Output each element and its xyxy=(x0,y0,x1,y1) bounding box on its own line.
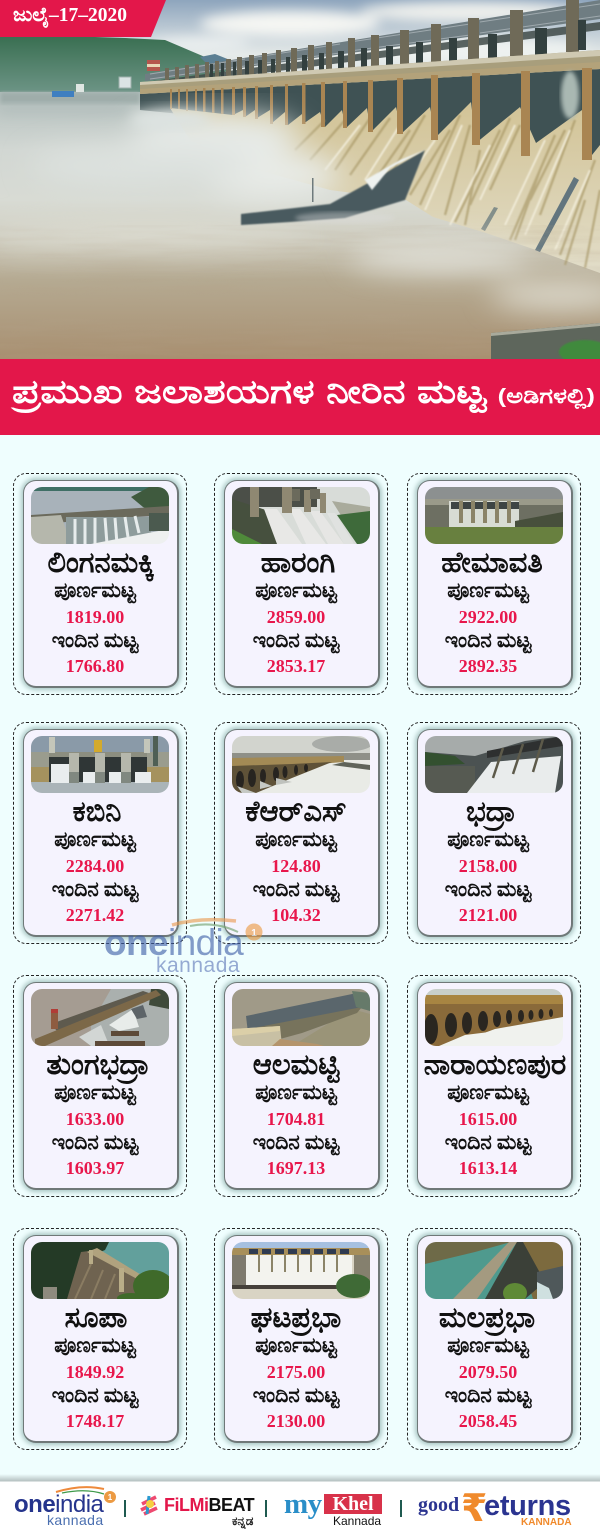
full level label: ಪೂರ್ಣಮಟ್ಟ xyxy=(255,829,337,851)
footer xyxy=(0,1470,600,1538)
spray at gate xyxy=(561,71,579,119)
spillway cascades xyxy=(170,102,600,273)
logo: oneindia: 1 xyxy=(108,1493,113,1502)
full level value: 2922.00 xyxy=(459,607,517,627)
panel: Kabini xyxy=(13,722,187,944)
date text: ಜುಲೈ–17–2020 xyxy=(13,5,127,26)
reservoir name: ನಾರಾಯಣಪುರ xyxy=(424,1049,566,1081)
panel: Harangi xyxy=(214,473,388,695)
logo: goodreturns xyxy=(418,1486,572,1530)
title bar xyxy=(0,359,600,435)
photo xyxy=(232,736,370,793)
full level value: 2175.00 xyxy=(267,1362,325,1382)
panel: Bhadra xyxy=(407,722,581,944)
panel: Ghataprabha xyxy=(214,1228,388,1450)
full level label: ಪೂರ್ಣಮಟ್ಟ xyxy=(54,580,136,602)
logo: goodreturns: KANNADA xyxy=(521,1517,572,1528)
reservoir name: ಕಬಿನಿ xyxy=(73,796,121,828)
panel: Narayanapura xyxy=(407,975,581,1197)
reservoir name: ಕೆಆರ್‌ಎಸ್ xyxy=(245,796,347,828)
today level label: ಇಂದಿನ ಮಟ್ಟ xyxy=(445,1132,531,1154)
full level label: ಪೂರ್ಣಮಟ್ಟ xyxy=(447,829,529,851)
water texture xyxy=(420,226,600,254)
logo: mykhel xyxy=(284,1488,382,1528)
watermark wordmark: oneindia xyxy=(104,922,243,963)
today level value: 104.32 xyxy=(271,905,321,925)
logo: filmibeat: ಕನ್ನಡ xyxy=(232,1514,253,1528)
panel: Tungabhadra xyxy=(13,975,187,1197)
photo xyxy=(232,487,370,544)
full level label: ಪೂರ್ಣಮಟ್ಟ xyxy=(447,1335,529,1357)
reservoir name: ಹಾರಂಗಿ xyxy=(261,547,335,579)
deck xyxy=(140,50,600,94)
photo xyxy=(425,1242,563,1299)
logo: oneindia: oneindia xyxy=(14,1491,103,1518)
today level label: ಇಂದಿನ ಮಟ್ಟ xyxy=(52,1132,138,1154)
full level label: ಪೂರ್ಣಮಟ್ಟ xyxy=(54,829,136,851)
today level value: 2121.00 xyxy=(459,905,517,925)
full level value: 1615.00 xyxy=(459,1109,517,1129)
photo xyxy=(425,736,563,793)
pier columns xyxy=(170,68,592,160)
photo xyxy=(31,736,169,793)
date banner xyxy=(0,0,166,37)
full level label: ಪೂರ್ಣಮಟ್ಟ xyxy=(54,1082,136,1104)
today level value: 2853.17 xyxy=(267,656,325,676)
today level value: 1603.97 xyxy=(66,1158,124,1178)
today level label: ಇಂದಿನ ಮಟ್ಟ xyxy=(253,879,339,901)
bottom right wall xyxy=(491,323,600,359)
today level value: 1613.14 xyxy=(459,1158,517,1178)
today level label: ಇಂದಿನ ಮಟ್ಟ xyxy=(253,630,339,652)
reservoir name: ಭದ್ರಾ xyxy=(466,796,516,828)
full level value: 1849.92 xyxy=(66,1362,124,1382)
photo xyxy=(31,1242,169,1299)
photo xyxy=(425,487,563,544)
full level label: ಪೂರ್ಣಮಟ್ಟ xyxy=(447,580,529,602)
gates xyxy=(140,69,600,155)
full level value: 2079.50 xyxy=(459,1362,517,1382)
today level label: ಇಂದಿನ ಮಟ್ಟ xyxy=(52,630,138,652)
full level value: 2158.00 xyxy=(459,856,517,876)
logo: oneindia: kannada xyxy=(47,1512,104,1528)
full level value: 124.80 xyxy=(271,856,321,876)
today level label: ಇಂದಿನ ಮಟ್ಟ xyxy=(52,879,138,901)
full level label: ಪೂರ್ಣಮಟ್ಟ xyxy=(447,1082,529,1104)
panel: Malaprabha xyxy=(407,1228,581,1450)
full level value: 1633.00 xyxy=(66,1109,124,1129)
panel: Almatti xyxy=(214,975,388,1197)
today level value: 1748.17 xyxy=(66,1411,124,1431)
today level value: 2058.45 xyxy=(459,1411,517,1431)
today level value: 1697.13 xyxy=(267,1158,325,1178)
panel: KRS xyxy=(214,722,388,944)
photo xyxy=(31,487,169,544)
panel: Hemavathi xyxy=(407,473,581,695)
today level label: ಇಂದಿನ ಮಟ್ಟ xyxy=(253,1385,339,1407)
title text: ಪ್ರಮುಖ ಜಲಾಶಯಗಳ ನೀರಿನ ಮಟ್ಟ (ಅಡಿಗಳಲ್ಲಿ) xyxy=(12,373,595,410)
logo: goodreturns: good xyxy=(418,1494,459,1516)
reservoir name: ಆಲಮಟ್ಟಿ xyxy=(253,1049,339,1081)
full level label: ಪೂರ್ಣಮಟ್ಟ xyxy=(255,1082,337,1104)
separator xyxy=(124,1500,126,1517)
reservoir name: ಮಲಪ್ರಭಾ xyxy=(439,1302,535,1334)
today level label: ಇಂದಿನ ಮಟ್ಟ xyxy=(445,879,531,901)
full level value: 1704.81 xyxy=(267,1109,325,1129)
reservoir name: ಲಿಂಗನಮಕ್ಕಿ xyxy=(47,547,155,579)
logo: mykhel: Kannada xyxy=(333,1514,381,1528)
full level label: ಪೂರ್ಣಮಟ್ಟ xyxy=(54,1335,136,1357)
watermark arc xyxy=(172,918,262,940)
full level value: 2284.00 xyxy=(66,856,124,876)
separator xyxy=(400,1500,402,1517)
full level value: 2859.00 xyxy=(267,607,325,627)
today level value: 2271.42 xyxy=(66,905,124,925)
logo: oneindia xyxy=(14,1486,116,1528)
full level label: ಪೂರ್ಣಮಟ್ಟ xyxy=(255,1335,337,1357)
logo: goodreturns: ₹ xyxy=(461,1486,487,1530)
photo xyxy=(425,989,563,1046)
logo: filmibeat xyxy=(140,1495,254,1529)
logo: mykhel: Khel xyxy=(332,1493,374,1515)
hero photo: dam with spillway xyxy=(0,0,600,359)
watermark arc: 1 xyxy=(251,928,257,939)
today level label: ಇಂದಿನ ಮಟ್ಟ xyxy=(253,1132,339,1154)
reservoir name: ಘಟಪ್ರಭಾ xyxy=(251,1302,341,1334)
photo xyxy=(31,989,169,1046)
full level value: 1819.00 xyxy=(66,607,124,627)
reservoir name: ಸೂಪಾ xyxy=(65,1302,127,1334)
mist xyxy=(0,113,600,309)
reservoir name: ಹೇಮಾವತಿ xyxy=(441,547,543,579)
logo: filmibeat: FiLMiBEAT xyxy=(164,1495,254,1515)
separator xyxy=(265,1500,267,1517)
today level label: ಇಂದಿನ ಮಟ್ಟ xyxy=(445,630,531,652)
reservoir name: ತುಂಗಭದ್ರಾ xyxy=(46,1049,150,1081)
logo: mykhel: my xyxy=(284,1488,322,1520)
watermark: oneindia kannada xyxy=(104,918,262,977)
today level label: ಇಂದಿನ ಮಟ್ಟ xyxy=(52,1385,138,1407)
today level value: 2892.35 xyxy=(459,656,517,676)
today level label: ಇಂದಿನ ಮಟ್ಟ xyxy=(445,1385,531,1407)
upper towers and truss xyxy=(145,0,600,88)
logo: goodreturns: eturns xyxy=(484,1490,571,1522)
watermark kannada: kannada xyxy=(156,954,240,977)
photo xyxy=(232,1242,370,1299)
full level label: ಪೂರ್ಣಮಟ್ಟ xyxy=(255,580,337,602)
today level value: 2130.00 xyxy=(267,1411,325,1431)
today level value: 1766.80 xyxy=(66,656,124,676)
panel: Linganamakki xyxy=(13,473,187,695)
panel: Supa xyxy=(13,1228,187,1450)
rock island xyxy=(241,150,425,225)
photo xyxy=(232,989,370,1046)
